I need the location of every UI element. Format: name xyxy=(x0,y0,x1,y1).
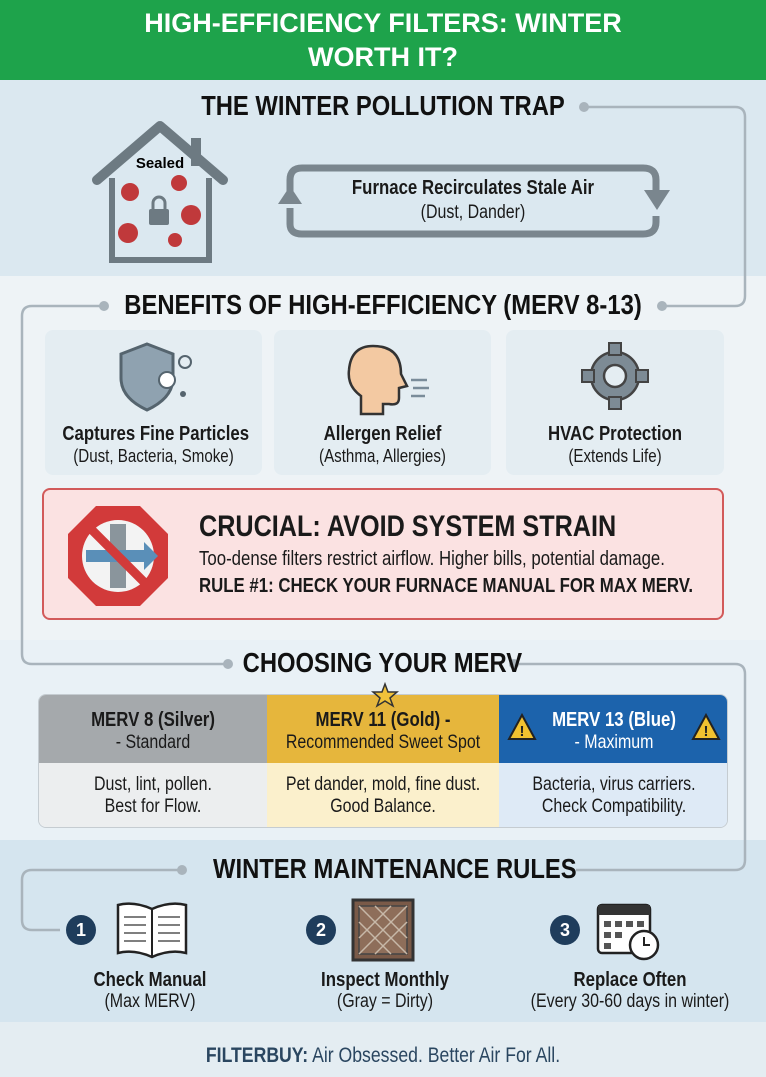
step 1: check manual: (Max MERV) xyxy=(104,991,196,1012)
merv comparison table: ! xyxy=(520,723,524,740)
merv comparison table: Best for Flow. xyxy=(105,796,201,817)
card: allergen relief: Allergen Relief xyxy=(324,423,441,445)
header banner xyxy=(0,0,766,80)
title: benefits: BENEFITS OF HIGH-EFFICIENCY (MERV 8-13) xyxy=(124,289,642,320)
merv comparison table: Recommended Sweet Spot xyxy=(286,732,480,753)
card: hvac protection: HVAC Protection xyxy=(548,423,682,445)
merv comparison table: - Maximum xyxy=(575,732,653,753)
merv comparison table: Bacteria, virus carriers. xyxy=(532,774,696,795)
card: fine particles: Captures Fine Particles xyxy=(62,423,249,445)
step 2: inspect monthly: Inspect Monthly xyxy=(321,969,449,991)
step 1: check manual: Check Manual xyxy=(94,969,206,991)
card: allergen relief xyxy=(274,330,491,475)
step 3: replace often: (Every 30-60 days in winter) xyxy=(531,991,729,1012)
card: allergen relief: (Asthma, Allergies) xyxy=(319,446,446,466)
step 3: replace often xyxy=(531,904,729,1012)
merv comparison table: ! xyxy=(704,723,708,740)
merv comparison table: - Standard xyxy=(116,732,190,753)
recirculation loop callout: Furnace Recirculates Stale Air xyxy=(352,177,594,199)
footer tagline: FILTERBUY: Air Obsessed. Better Air For All. xyxy=(206,1044,560,1067)
merv comparison table: Check Compatibility. xyxy=(542,796,686,817)
icon: sealed house xyxy=(92,121,228,263)
merv comparison table xyxy=(38,694,728,828)
icon: star xyxy=(371,682,399,708)
step 1: check manual xyxy=(66,902,206,1012)
card: fine particles xyxy=(45,330,262,475)
step 1: check manual: 1 xyxy=(76,920,86,940)
warning box: system strain: RULE #1: CHECK YOUR FURNACE MANUAL FOR MAX MERV. xyxy=(199,575,693,597)
step 2: inspect monthly xyxy=(306,898,449,1012)
card: hvac protection xyxy=(506,330,724,475)
title: choosing your merv: CHOOSING YOUR MERV xyxy=(243,647,522,678)
title: winter pollution trap: THE WINTER POLLUTION TRAP xyxy=(201,90,565,121)
recirculation loop callout: (Dust, Dander) xyxy=(421,202,525,223)
warning box: system strain xyxy=(42,488,724,620)
title: winter maintenance rules: WINTER MAINTENANCE RULES xyxy=(213,853,577,884)
step 2: inspect monthly: (Gray = Dirty) xyxy=(337,991,433,1012)
warning box: system strain: Too-dense filters restrict airflow. Higher bills, potential damage. xyxy=(199,548,665,570)
merv comparison table: Good Balance. xyxy=(330,796,436,817)
card: fine particles: (Dust, Bacteria, Smoke) xyxy=(73,446,234,466)
section backgrounds xyxy=(0,80,766,276)
card: hvac protection: (Extends Life) xyxy=(568,446,662,466)
step 3: replace often: Replace Often xyxy=(574,969,686,991)
merv comparison table: MERV 11 (Gold) - xyxy=(315,709,451,731)
warning box: system strain: CRUCIAL: AVOID SYSTEM STRAIN xyxy=(199,510,616,543)
recirculation loop callout xyxy=(278,164,670,238)
header banner: WORTH IT? xyxy=(308,42,458,72)
icon: no airflow sign xyxy=(68,506,168,606)
merv comparison table: MERV 13 (Blue) xyxy=(552,709,676,731)
step 2: inspect monthly: 2 xyxy=(316,920,326,940)
merv comparison table: Dust, lint, pollen. xyxy=(94,774,212,795)
header banner: HIGH-EFFICIENCY FILTERS: WINTER xyxy=(144,8,622,38)
merv comparison table: Pet dander, mold, fine dust. xyxy=(286,774,480,795)
icon: sealed house: Sealed xyxy=(136,155,184,172)
step 3: replace often: 3 xyxy=(560,920,570,940)
merv comparison table: MERV 8 (Silver) xyxy=(91,709,215,731)
